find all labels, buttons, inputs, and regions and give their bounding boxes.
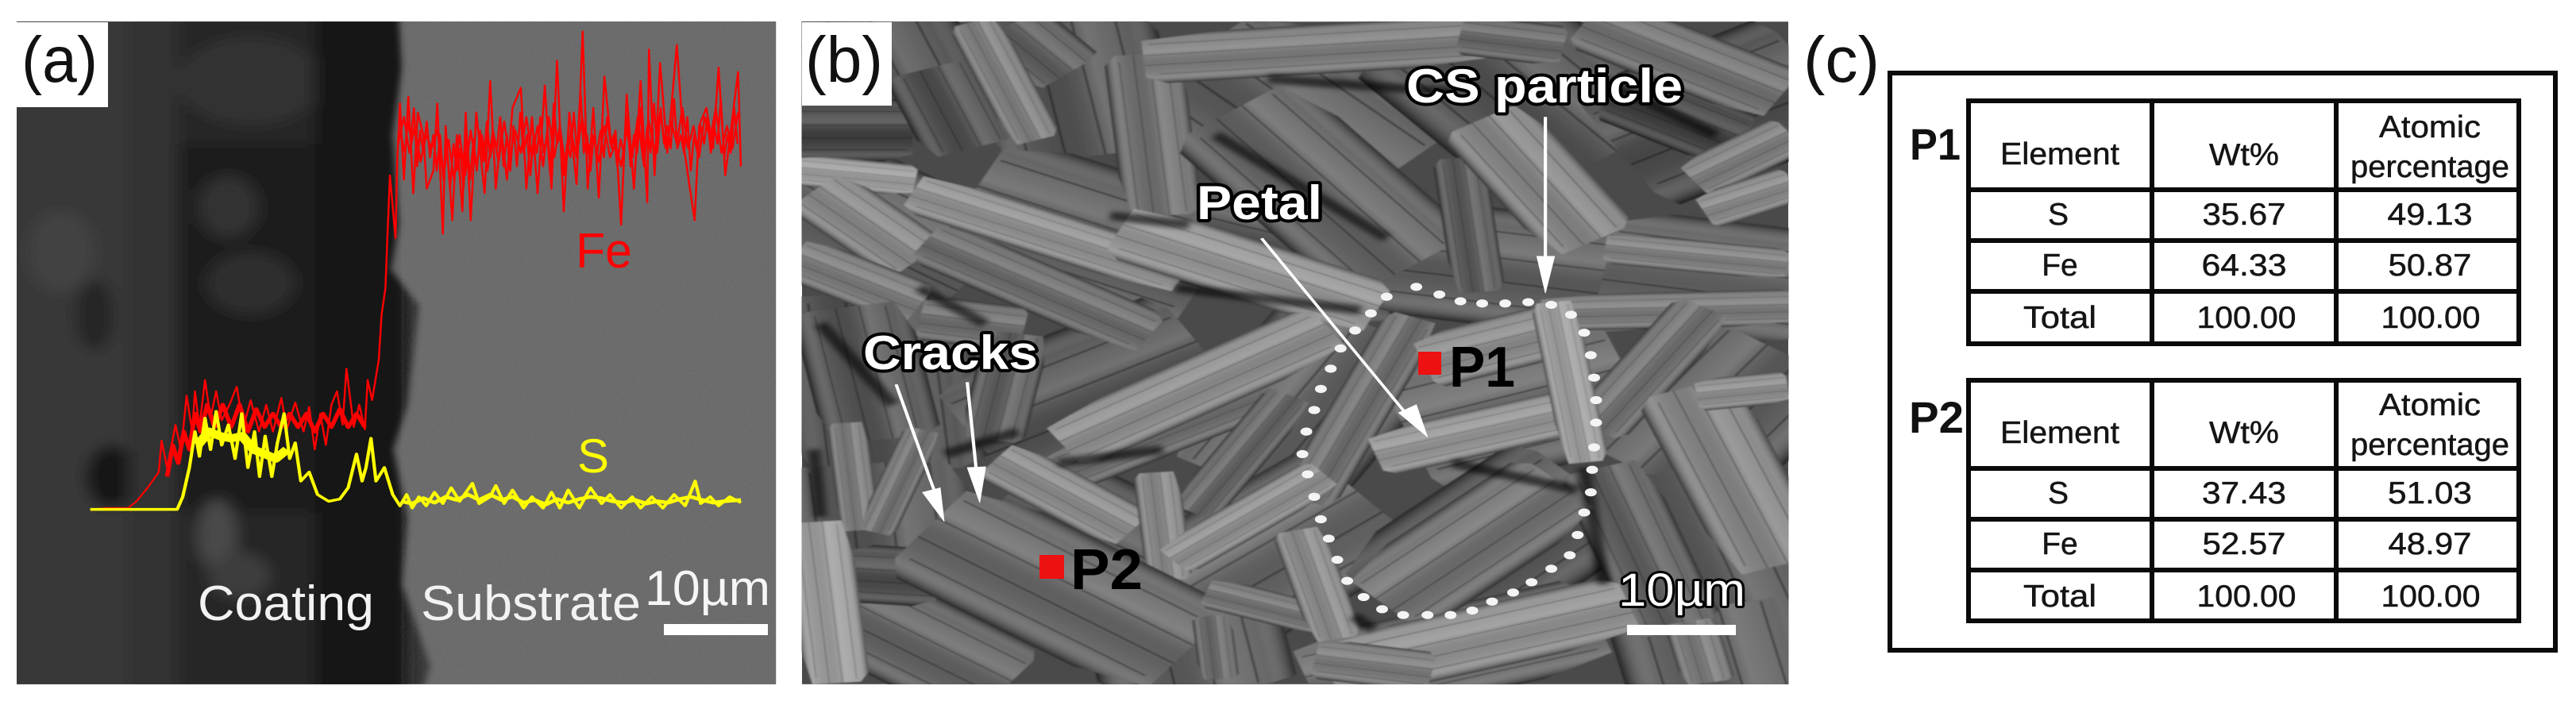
table: P2 composition: Element bbox=[2000, 416, 2119, 450]
table: P1 composition: Total bbox=[2023, 301, 2096, 335]
table: P2 composition: Fe bbox=[2042, 527, 2078, 561]
table: P1 composition: 100.00 bbox=[2196, 301, 2296, 335]
scale bar bbox=[664, 624, 768, 635]
scale bar bbox=[1627, 625, 1736, 635]
label: Petal: Petal bbox=[1197, 176, 1322, 229]
table: P1 composition bbox=[1969, 101, 2519, 344]
table: P2 composition: 100.00 bbox=[2381, 580, 2481, 614]
label: P2: P2 bbox=[1909, 392, 1964, 442]
table: P1 composition: Atomic bbox=[2379, 110, 2481, 144]
label: scale 10µm: 10µm bbox=[1618, 564, 1745, 616]
panel letter (b): (b) bbox=[805, 24, 883, 96]
table: P1 composition: Fe bbox=[2042, 248, 2078, 283]
panel letter tab bbox=[17, 22, 108, 107]
panel a: cross-section SEM with line scan bbox=[0, 9, 802, 701]
table: P1 composition: 49.13 bbox=[2387, 198, 2473, 232]
arrow: Petal bbox=[1262, 238, 1428, 437]
line scan: S bbox=[91, 411, 741, 510]
substrate bbox=[391, 9, 802, 701]
table: P1 composition: 50.87 bbox=[2389, 248, 2471, 283]
panel letter (c): (c) bbox=[1803, 24, 1880, 96]
table: P1 composition: Wt% bbox=[2209, 138, 2279, 172]
label: CS particle: CS particle bbox=[1406, 60, 1683, 113]
table: P2 composition: 100.00 bbox=[2196, 580, 2296, 614]
table: P1 composition: 100.00 bbox=[2381, 301, 2481, 335]
panel letter (a): (a) bbox=[21, 24, 98, 96]
line scan: Fe bbox=[91, 32, 741, 510]
arrow: Cracks right bbox=[967, 382, 985, 503]
table: P2 composition: S bbox=[2048, 476, 2069, 510]
table: P1 composition: 35.67 bbox=[2203, 198, 2285, 232]
dotted outline: CS particle bbox=[1297, 283, 1602, 619]
table: P2 composition: 51.03 bbox=[2388, 476, 2472, 510]
label: Coating: Coating bbox=[198, 576, 374, 631]
marker: P1 bbox=[1418, 352, 1441, 375]
label: Substrate: Substrate bbox=[421, 576, 641, 631]
outer frame bbox=[1890, 73, 2555, 650]
panel c: composition tables bbox=[1803, 24, 2555, 650]
arrow: CS particle bbox=[1537, 117, 1555, 293]
table: P2 composition bbox=[1969, 380, 2519, 621]
label: S: S bbox=[577, 430, 609, 483]
table: P2 composition: percentage bbox=[2350, 428, 2509, 462]
label: scale 10µm: 10µm bbox=[645, 561, 770, 616]
table: P2 composition: Total bbox=[2023, 580, 2096, 614]
micrograph: petal morphology bbox=[802, 21, 1788, 684]
arrow: Cracks left bbox=[897, 384, 944, 522]
table: P1 composition: Element bbox=[2000, 137, 2119, 171]
table: P2 composition: 37.43 bbox=[2202, 476, 2286, 510]
table: P2 composition: 48.97 bbox=[2389, 527, 2471, 561]
label: P2: P2 bbox=[1070, 538, 1143, 602]
marker: P2 bbox=[1039, 555, 1064, 579]
table: P1 composition: 64.33 bbox=[2201, 248, 2287, 283]
panel b: surface SEM with petals bbox=[802, 21, 1788, 684]
micrograph: cross-section bbox=[0, 9, 802, 701]
table: P2 composition: Wt% bbox=[2209, 416, 2279, 450]
table: P1 composition: percentage bbox=[2350, 150, 2509, 184]
table: P1 composition: S bbox=[2048, 198, 2069, 232]
label: Fe: Fe bbox=[576, 224, 632, 279]
table: P2 composition: Atomic bbox=[2379, 388, 2481, 422]
label: P1: P1 bbox=[1910, 119, 1961, 169]
label: P1: P1 bbox=[1449, 336, 1515, 399]
table: P2 composition: 52.57 bbox=[2203, 527, 2285, 561]
label: Cracks: Cracks bbox=[863, 326, 1038, 379]
panel letter tab bbox=[802, 22, 892, 106]
